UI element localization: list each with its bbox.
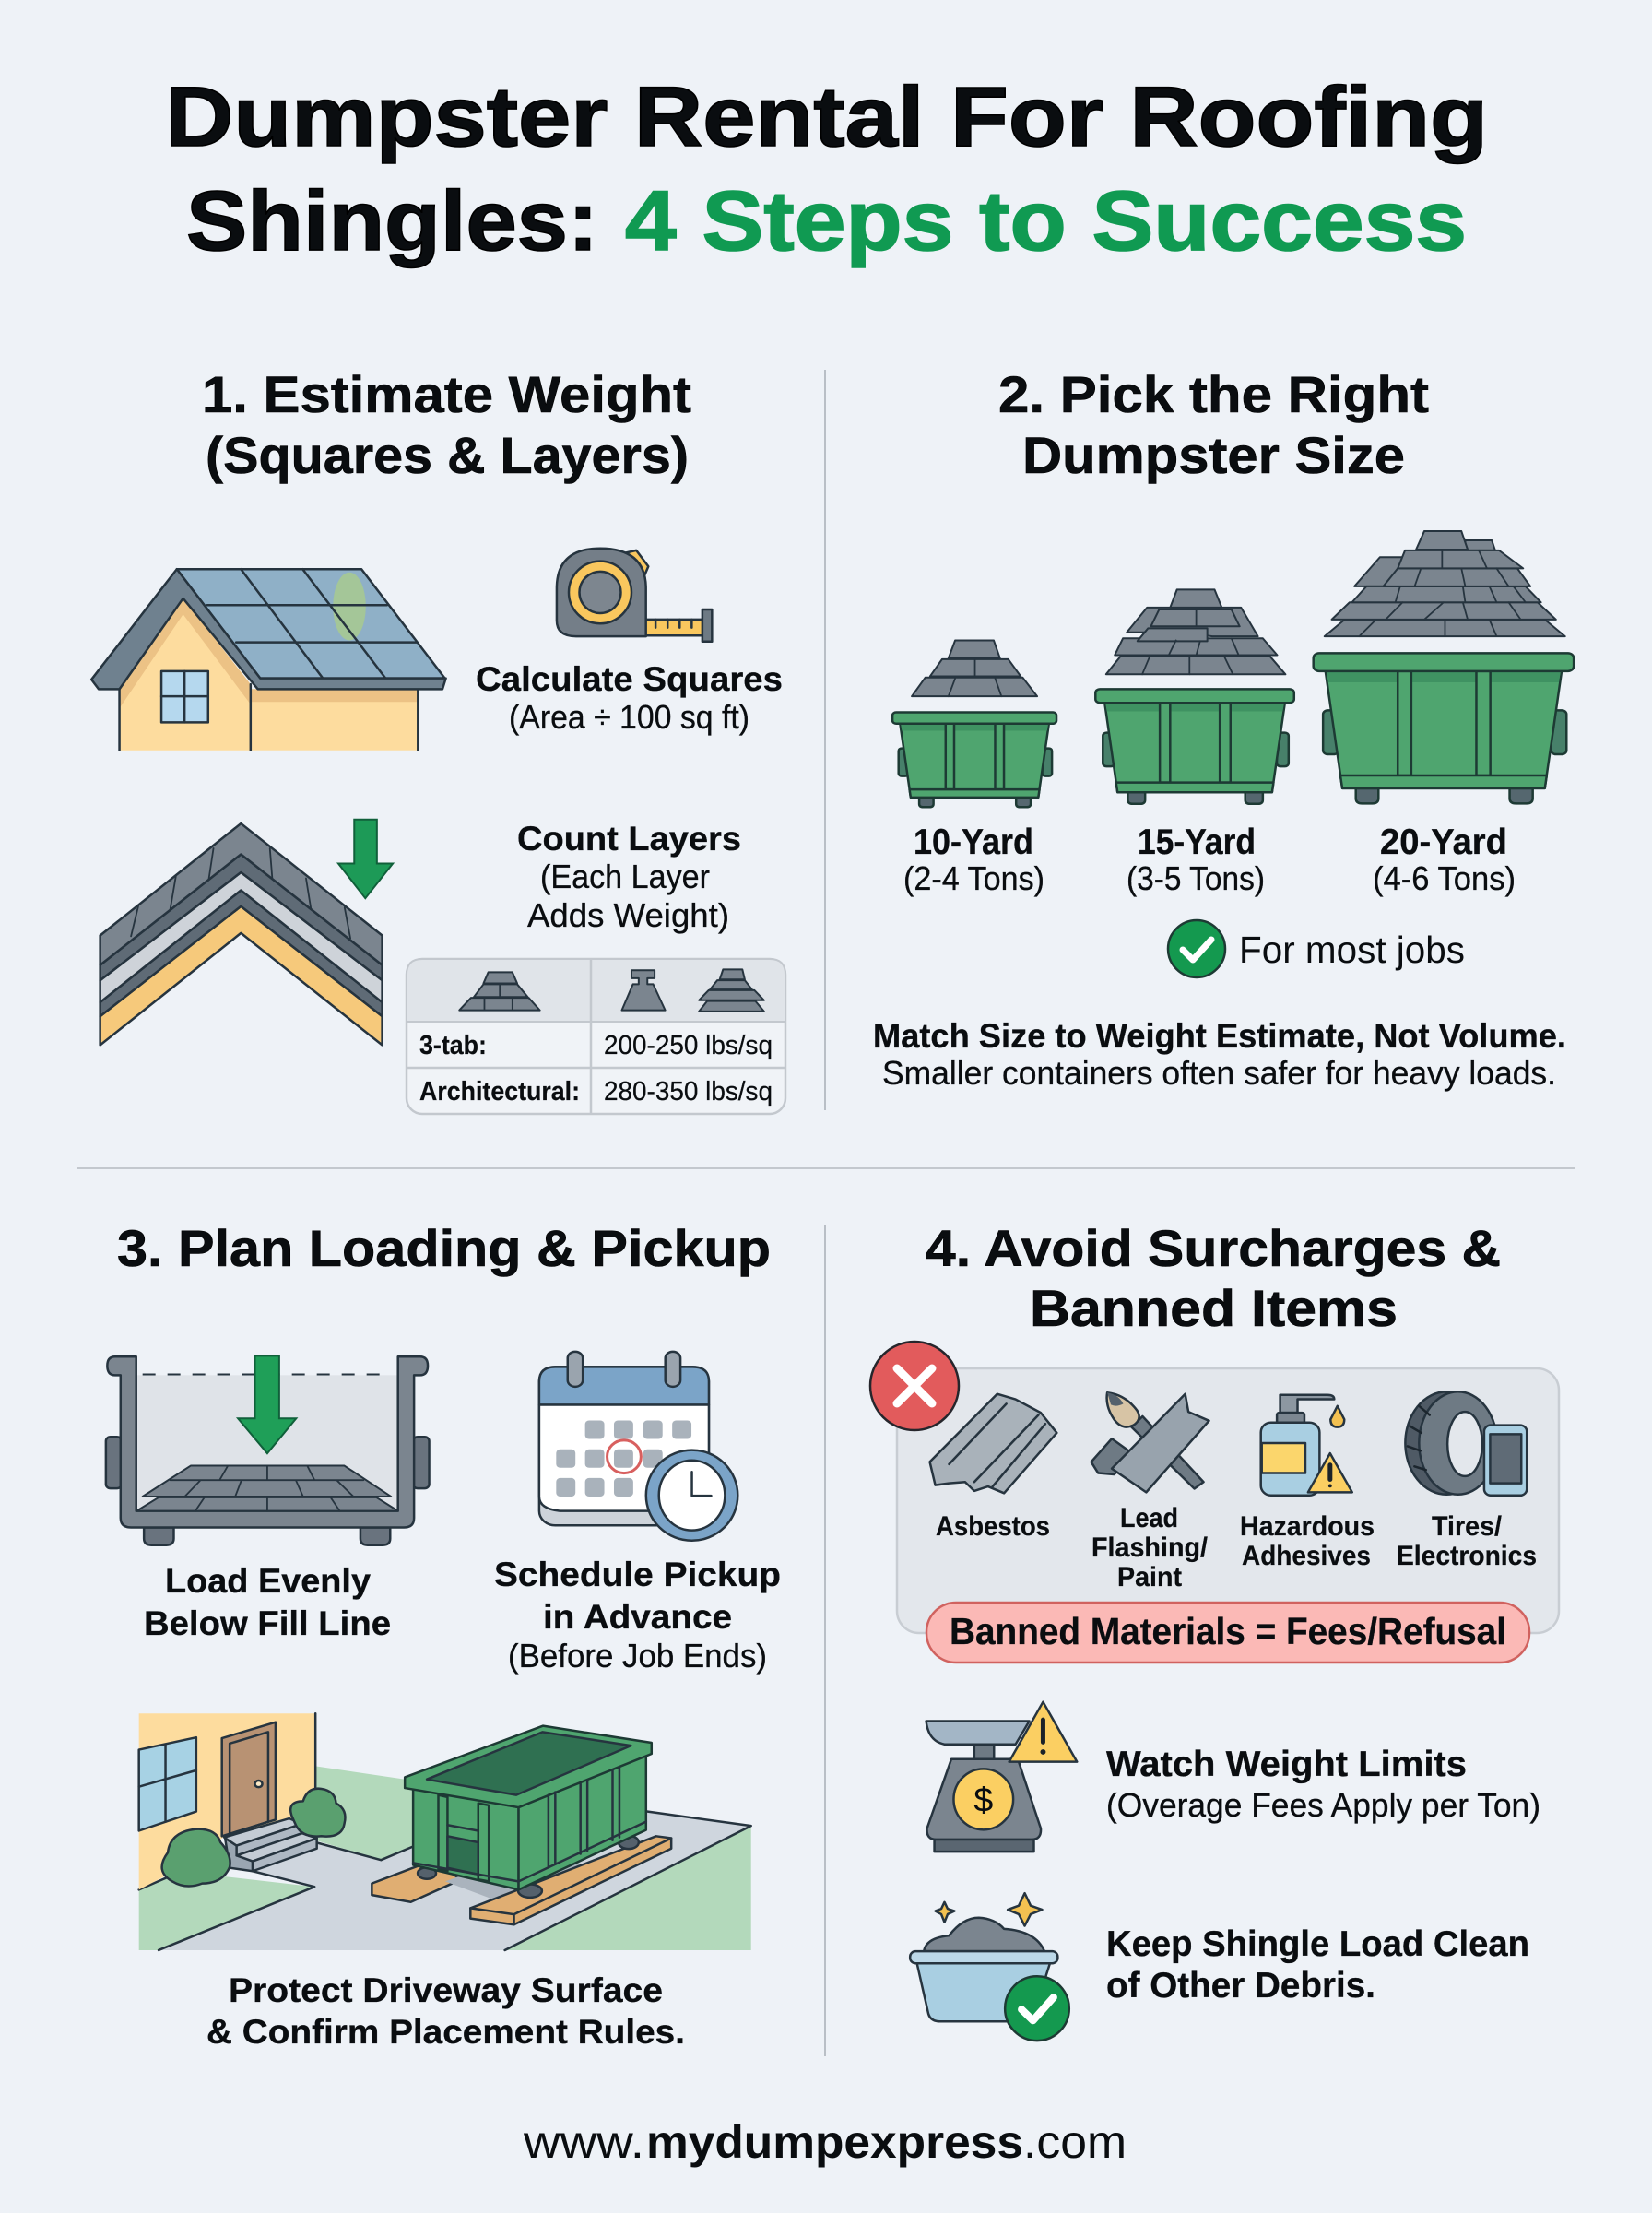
label: calculate squares: Calculate Squares xyxy=(476,660,783,698)
icon: scale with dollar and warning xyxy=(926,1702,1077,1852)
panel: banned materials xyxy=(870,1342,1559,1663)
title xyxy=(165,70,1488,268)
label: count layers: (Each Layer xyxy=(540,858,710,895)
label: load evenly xyxy=(144,1562,391,1642)
text: keep load clean xyxy=(1106,1924,1529,2006)
icon: house with roof grid xyxy=(91,569,446,751)
icon: lead flashing and paint brush xyxy=(1092,1392,1210,1492)
heading: step 2: 2. Pick the Right xyxy=(998,365,1429,423)
icon: green check xyxy=(1168,920,1225,977)
table: shingle weights xyxy=(407,959,785,1114)
heading: step 1: 1. Estimate Weight xyxy=(202,365,691,423)
labels: banned items: Asbestos xyxy=(936,1511,1050,1542)
labels: banned items: Tires/ xyxy=(1432,1511,1503,1542)
icon: asbestos xyxy=(930,1394,1056,1493)
title: Shingles: xyxy=(186,174,598,268)
heading: step 1 xyxy=(202,365,691,484)
label: calculate squares xyxy=(476,660,783,736)
icon: roof layers cross-section xyxy=(100,823,383,1045)
table: shingle weights: 3-tab: xyxy=(419,1031,487,1060)
heading: step 4 xyxy=(926,1219,1501,1337)
table: shingle weights: 200-250 lbs/sq xyxy=(604,1031,773,1060)
label: for most jobs: For most jobs xyxy=(1239,929,1465,971)
label: 10-yard xyxy=(903,822,1044,897)
icon: 15-yard dumpster with shingles xyxy=(1095,589,1294,804)
heading: step 2: Dumpster Size xyxy=(1022,426,1405,484)
heading: step 1: (Squares & Layers) xyxy=(206,426,689,484)
title: 4 Steps to Success xyxy=(625,174,1467,268)
label: 15-yard: 15-Yard xyxy=(1138,822,1256,862)
text block: sizing advice: Smaller containers often safer for heavy loads. xyxy=(882,1054,1556,1092)
footer: website xyxy=(523,2116,1127,2168)
label: 20-yard xyxy=(1373,822,1516,897)
text: watch weight limits xyxy=(1106,1745,1540,1824)
icon: 3-tab shingle stack xyxy=(459,972,540,1011)
panel: step 3 plan loading and pickup xyxy=(106,1219,781,2051)
footer: website: .com xyxy=(1023,2116,1127,2168)
callout: banned materials fees xyxy=(926,1603,1529,1663)
icon: 20-yard dumpster with shingles xyxy=(1314,531,1574,803)
panel: step 2 pick dumpster size xyxy=(873,365,1574,1092)
label: protect driveway xyxy=(206,1971,685,2051)
label: schedule pickup: (Before Job Ends) xyxy=(508,1637,767,1675)
label: schedule pickup: in Advance xyxy=(543,1598,732,1636)
heading: step 2 xyxy=(998,365,1429,484)
label: load evenly: Load Evenly xyxy=(165,1562,371,1600)
icon: 10-yard dumpster with shingles xyxy=(892,640,1056,807)
labels: banned items: Flashing/ xyxy=(1092,1533,1209,1563)
icon: weight and architectural shingle stack xyxy=(622,969,764,1012)
icon: tape measure xyxy=(557,549,712,642)
title: Dumpster Rental For Roofing xyxy=(165,70,1488,164)
label: protect driveway: & Confirm Placement Rules. xyxy=(206,2013,685,2051)
callout: banned materials fees: Banned Materials = Fees/Refusal xyxy=(950,1610,1506,1652)
labels: banned items: Paint xyxy=(1117,1562,1182,1592)
panel: step 4 avoid surcharges xyxy=(870,1219,1559,2041)
footer: website: www. xyxy=(523,2116,644,2168)
text block: sizing advice xyxy=(873,1017,1566,1092)
text block: sizing advice: Match Size to Weight Estimate, Not Volume. xyxy=(873,1017,1566,1055)
label: 15-yard: (3-5 Tons) xyxy=(1127,859,1265,897)
illustration: dumpster placed on boards in driveway xyxy=(139,1713,751,1950)
icon: clean basin with check xyxy=(910,1893,1069,2041)
label: 10-yard: 10-Yard xyxy=(914,822,1033,862)
text: keep load clean: of Other Debris. xyxy=(1106,1966,1375,2006)
icon: tire and phone xyxy=(1405,1391,1527,1496)
label: load evenly: Below Fill Line xyxy=(144,1604,391,1642)
panel: step 1 estimate weight xyxy=(91,365,785,1114)
text: watch weight limits: Watch Weight Limits xyxy=(1106,1745,1467,1784)
label: count layers xyxy=(517,820,741,934)
label: protect driveway: Protect Driveway Surface xyxy=(229,1971,663,2009)
arrow: down into layers xyxy=(338,820,393,898)
labels: banned items: Adhesives xyxy=(1242,1541,1371,1571)
labels: banned items xyxy=(936,1503,1537,1592)
labels: banned items: Electronics xyxy=(1397,1541,1537,1571)
icon: scale with dollar and warning: $ xyxy=(974,1781,994,1818)
heading: step 3: 3. Plan Loading & Pickup xyxy=(117,1219,771,1277)
icon: calendar with clock xyxy=(539,1352,738,1541)
label: 20-yard: 20-Yard xyxy=(1380,822,1507,862)
label: 15-yard xyxy=(1127,822,1265,897)
labels: banned items: Lead xyxy=(1120,1503,1178,1533)
label: count layers: Count Layers xyxy=(517,820,741,858)
icon: hazardous adhesive bottle xyxy=(1261,1395,1352,1496)
heading: step 4: 4. Avoid Surcharges & xyxy=(926,1219,1501,1277)
labels: banned items: Hazardous xyxy=(1240,1511,1375,1542)
label: 20-yard: (4-6 Tons) xyxy=(1373,859,1516,897)
icon: red x badge xyxy=(870,1342,959,1430)
footer: website: mydumpexpress xyxy=(646,2116,1023,2168)
text: keep load clean: Keep Shingle Load Clean xyxy=(1106,1924,1529,1964)
icon: dumpster cross-section with fill line xyxy=(106,1355,430,1545)
table: shingle weights: 280-350 lbs/sq xyxy=(604,1077,773,1106)
table: shingle weights: Architectural: xyxy=(419,1077,580,1106)
label: calculate squares: (Area ÷ 100 sq ft) xyxy=(509,698,749,736)
label: schedule pickup: Schedule Pickup xyxy=(494,1556,781,1593)
heading: step 4: Banned Items xyxy=(1030,1279,1398,1337)
label: schedule pickup xyxy=(494,1556,781,1675)
label: 10-yard: (2-4 Tons) xyxy=(903,859,1044,897)
text: watch weight limits: (Overage Fees Apply per Ton) xyxy=(1106,1786,1540,1824)
label: count layers: Adds Weight) xyxy=(527,896,729,934)
